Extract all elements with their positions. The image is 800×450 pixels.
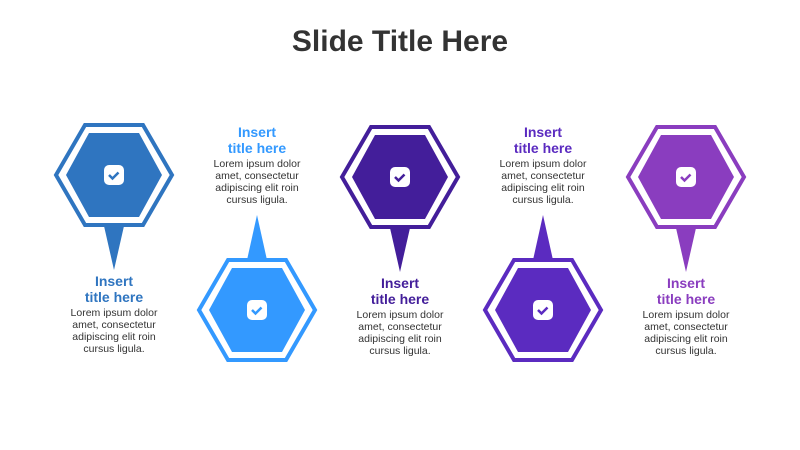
text 1: title here	[85, 288, 143, 304]
hexagon 5	[628, 127, 744, 272]
text 3	[357, 275, 444, 357]
hexagon 4	[485, 215, 601, 360]
text 3: Insert	[381, 275, 419, 291]
text 5	[643, 275, 730, 357]
hexagon 1	[56, 125, 172, 270]
text 1	[71, 273, 158, 355]
text 5: title here	[657, 290, 715, 306]
text 4: title here	[514, 140, 572, 156]
title: Slide Title Here	[292, 25, 508, 58]
text 5: Lorem ipsum dolor amet, consectetur adipiscing elit roin cursus ligula.	[643, 309, 729, 357]
text 2	[214, 124, 300, 206]
text 3: title here	[371, 290, 429, 306]
text 5: Insert	[667, 275, 705, 291]
text 3: Lorem ipsum dolor amet, consectetur adipiscing elit roin cursus ligula.	[357, 309, 443, 357]
text 4: Insert	[524, 124, 562, 140]
text 4	[500, 124, 586, 206]
text 1: Insert	[95, 273, 133, 289]
text 2: Insert	[238, 124, 276, 140]
text 4: Lorem ipsum dolor amet, consectetur adipiscing elit roin cursus ligula.	[500, 158, 586, 206]
text 2: title here	[228, 140, 286, 156]
text 2: Lorem ipsum dolor amet, consectetur adipiscing elit roin cursus ligula.	[214, 158, 300, 206]
hexagon 2	[199, 215, 315, 360]
text 1: Lorem ipsum dolor amet, consectetur adipiscing elit roin cursus ligula.	[71, 307, 157, 355]
hexagon 3	[342, 127, 458, 272]
